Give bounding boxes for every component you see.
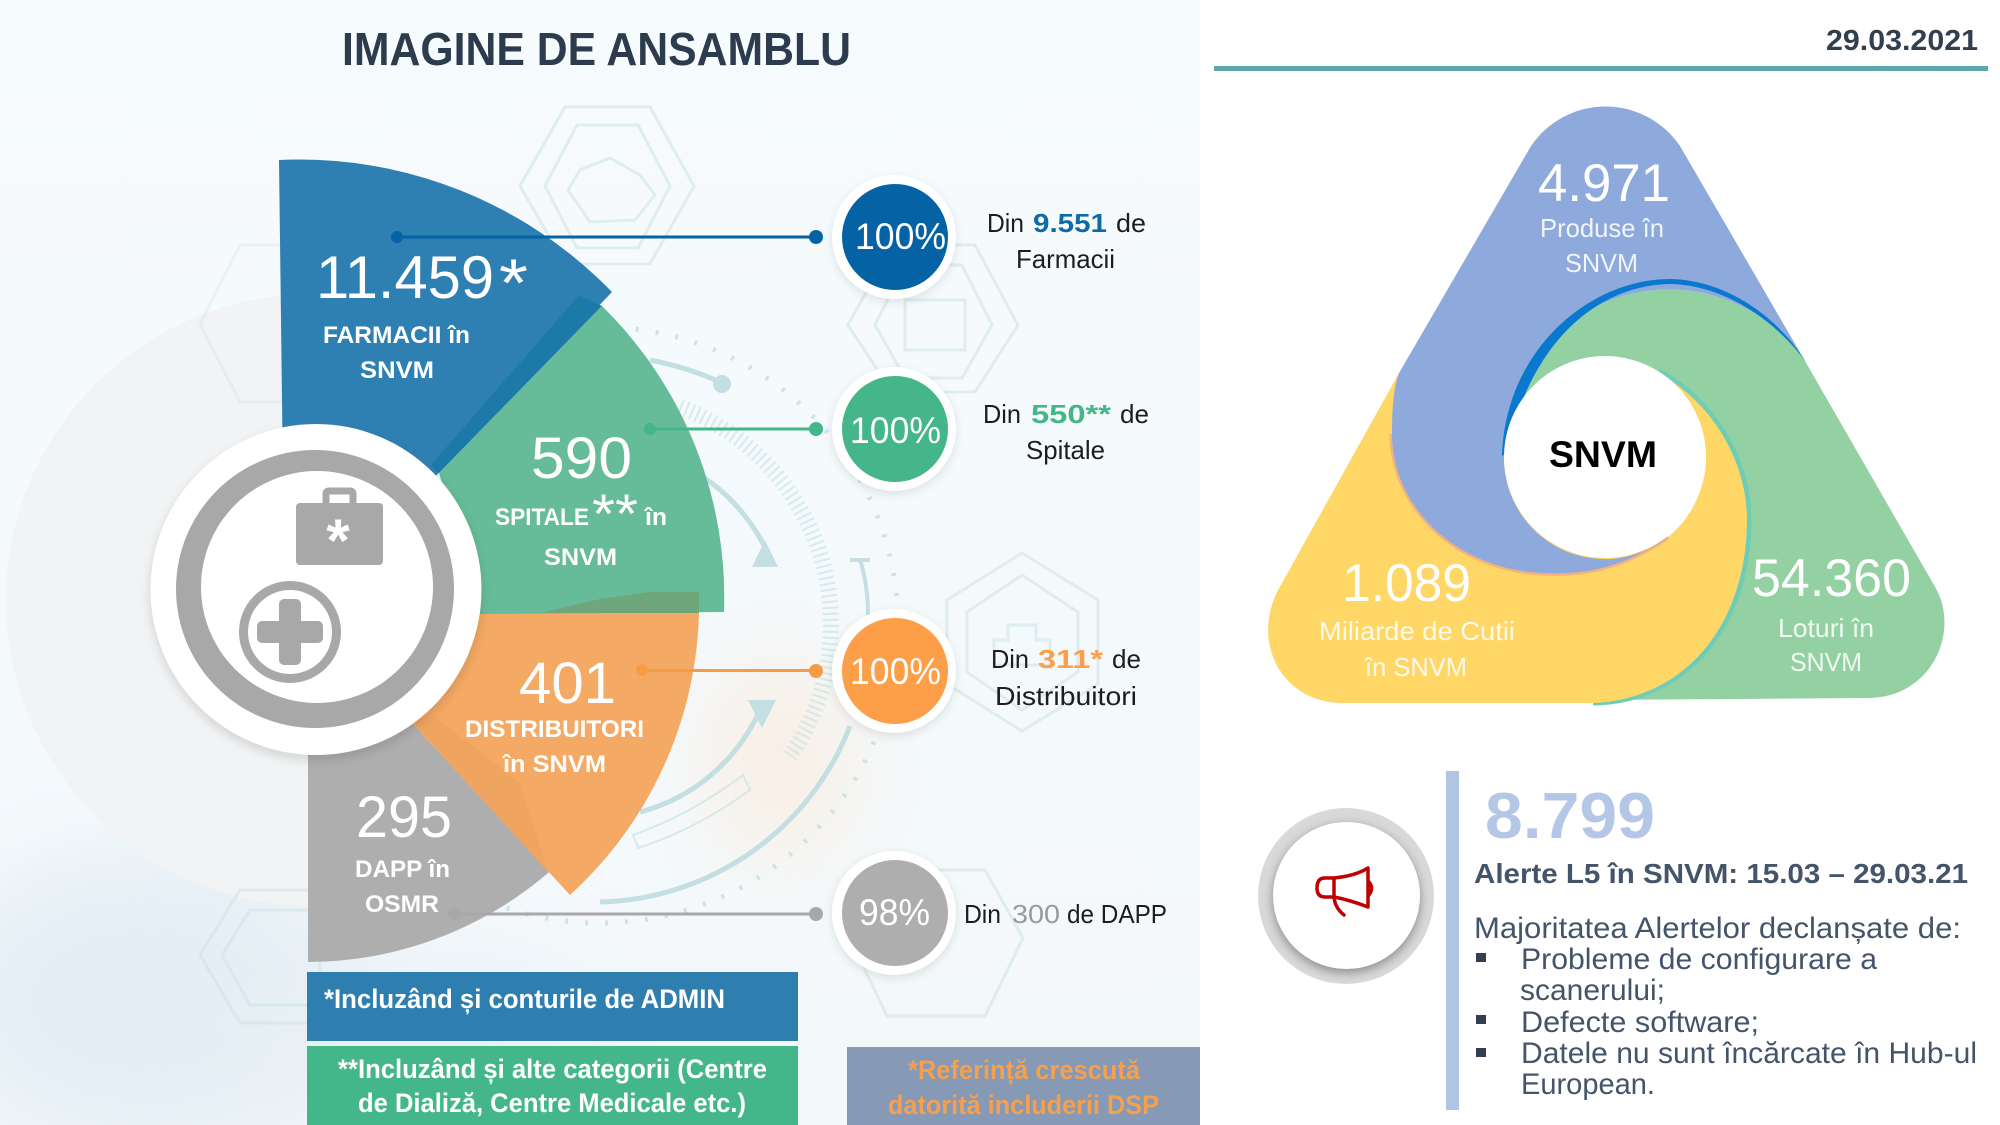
label: spitale: în [644, 504, 667, 531]
note: admin accounts [307, 972, 798, 1041]
alert causes list: Defecte software; [1521, 1006, 1759, 1039]
label: farmacii [316, 244, 528, 384]
label: DAPP: OSMR [365, 891, 439, 918]
text: din spitale: 550** [1031, 399, 1112, 429]
text: din distribuitori: 311* [1038, 644, 1104, 674]
label: spitale [495, 426, 667, 571]
alert causes list: Majoritatea Alertelor declanșate de: [1474, 912, 1961, 945]
note: other categories [307, 1046, 798, 1125]
wedge: distributors [411, 592, 699, 895]
central medical icon [150, 424, 482, 760]
wedge: DAPP [308, 715, 555, 962]
note: DSP reference: *Referință crescută [908, 1055, 1141, 1085]
accent: blue crescent [1502, 279, 1806, 456]
stat: loturi: SNVM [1790, 647, 1862, 677]
alert number: 8.799 [1485, 779, 1655, 852]
percent badge: distribuitori [832, 609, 956, 736]
stat: produse: SNVM [1565, 248, 1638, 278]
note: DSP reference [847, 1047, 1200, 1125]
triangle diagram [1268, 106, 1945, 703]
alert causes list: scanerului; [1520, 974, 1665, 1007]
label: spitale: 590 [531, 426, 632, 491]
wedge: hospitals [439, 306, 724, 614]
text: din farmacii: de [1116, 208, 1146, 238]
alert causes list: Probleme de configurare a [1521, 943, 1877, 976]
segment: cutii [1268, 373, 1747, 703]
stat: loturi [1752, 549, 1911, 677]
connector: spitale [644, 422, 823, 436]
icon: megaphone [1317, 868, 1372, 915]
text: din farmacii: Din [987, 208, 1024, 238]
label: DAPP: DAPP în [355, 856, 450, 883]
accent: teal edge [1593, 373, 1747, 701]
icon: megaphone badge [1258, 808, 1434, 984]
text: din spitale [983, 399, 1149, 465]
label: spitale: SPITALE [495, 504, 589, 531]
alert causes list: European. [1521, 1068, 1655, 1101]
text: din DAPP: de DAPP [1067, 899, 1167, 929]
note: other categories: de Dializă, Centre Medicale etc.) [358, 1088, 746, 1118]
text: din distribuitori [991, 644, 1141, 711]
segment: produse [1392, 106, 1805, 573]
text: din distribuitori: Din [991, 644, 1029, 674]
alert causes list [1474, 912, 1977, 1101]
label: farmacii: * [499, 245, 528, 321]
note: admin accounts: *Incluzând și conturile de ADMIN [324, 984, 725, 1014]
center disc [1504, 356, 1706, 558]
connector: distribuitori [636, 664, 823, 678]
stat: cutii [1319, 554, 1515, 682]
segment: loturi [1504, 289, 1945, 700]
label: spitale: SNVM [544, 544, 617, 571]
text: din spitale: de [1120, 399, 1149, 429]
label: farmacii: 11.459 [316, 244, 494, 311]
text: din spitale: Din [983, 399, 1021, 429]
text: din DAPP: Din [964, 899, 1001, 929]
fan chart [279, 160, 724, 962]
alert heading: Alerte L5 în SNVM: 15.03 – 29.03.21 [1474, 858, 1968, 889]
text: din DAPP: 300 [1012, 899, 1060, 929]
label: DAPP: 295 [356, 785, 452, 850]
stat: produse [1538, 154, 1670, 278]
percent badge: distribuitori: 100% [850, 651, 941, 692]
text: din farmacii [987, 208, 1146, 274]
text: din distribuitori: Distribuitori [995, 681, 1137, 711]
text: din DAPP [964, 899, 1167, 929]
label: spitale: ** [592, 482, 638, 545]
accent: orange edge [1392, 434, 1668, 573]
label: distribuitori: 401 [519, 651, 616, 716]
connector: farmacii [391, 230, 823, 244]
text: din distribuitori: de [1112, 644, 1141, 674]
header rule [1214, 66, 1988, 71]
icon: first aid case [296, 491, 383, 574]
date: 29.03.2021 [1826, 25, 1978, 57]
stat: produse: 4.971 [1538, 154, 1670, 213]
wedge: pharmacies [279, 160, 612, 482]
label: distribuitori: în SNVM [502, 751, 606, 778]
stat: cutii: 1.089 [1342, 554, 1471, 613]
label: DAPP [355, 785, 452, 918]
label: farmacii: SNVM [360, 357, 434, 384]
text: din spitale: Spitale [1026, 435, 1105, 465]
note: DSP reference: datorită includerii DSP [888, 1090, 1159, 1120]
icon: plus in circle [244, 586, 336, 678]
stat: loturi: 54.360 [1752, 549, 1911, 608]
center label: SNVM [1549, 434, 1657, 475]
percent badge: DAPP [832, 851, 956, 978]
stat: cutii: Miliarde de Cutii [1319, 616, 1515, 646]
label: distribuitori [465, 651, 644, 778]
percent badge: farmacii: 100% [855, 216, 946, 257]
stat: loturi: Loturi în [1778, 613, 1874, 643]
connector: DAPP [448, 907, 823, 921]
label: farmacii: FARMACII în [323, 322, 470, 349]
percent badge: farmacii [832, 175, 956, 302]
alert causes list: Datele nu sunt încărcate în Hub-ul [1521, 1037, 1977, 1070]
label: distribuitori: DISTRIBUITORI [465, 716, 644, 743]
stat: produse: Produse în [1540, 213, 1664, 243]
note: other categories: **Incluzând și alte categorii (Centre [338, 1054, 767, 1084]
left panel background [0, 0, 1200, 1125]
text: din farmacii: Farmacii [1016, 244, 1115, 274]
title: IMAGINE DE ANSAMBLU [342, 23, 851, 75]
stat: cutii: în SNVM [1364, 652, 1467, 682]
percent badge: spitale: 100% [850, 410, 941, 451]
text: din farmacii: 9.551 [1033, 208, 1107, 238]
icon: first aid case: * [326, 507, 350, 574]
percent badge: spitale [832, 367, 956, 494]
percent badge: DAPP: 98% [859, 892, 930, 933]
alert divider bar [1446, 771, 1459, 1110]
